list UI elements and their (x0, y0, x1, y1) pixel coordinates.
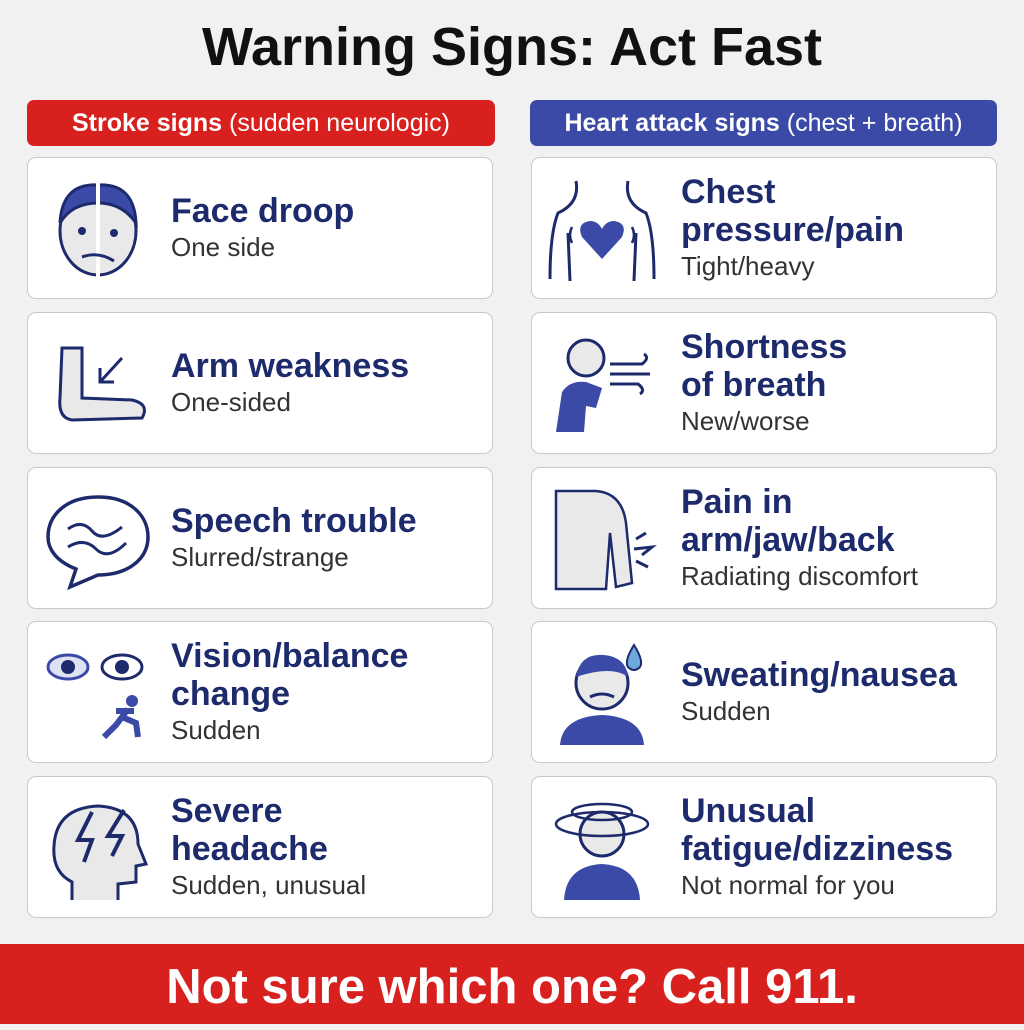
card: chest pressure: pressure/pain (681, 211, 904, 249)
card: face droop (27, 157, 493, 299)
card: shortness of breath (531, 312, 997, 454)
header: heart attack signs (530, 100, 997, 146)
card: severe headache (27, 776, 493, 918)
card: pain arm/jaw/back (531, 467, 997, 609)
card: arm weakness: One-sided (171, 387, 291, 417)
card: speech trouble (27, 467, 493, 609)
card: fatigue/dizziness: Unusual (681, 792, 815, 830)
header: stroke signs (27, 100, 495, 146)
card: face droop: Face droop (171, 192, 354, 230)
card: chest pressure (531, 157, 997, 299)
card: vision/balance: Sudden (171, 715, 261, 745)
footer banner: Not sure which one? Call 911. (166, 960, 858, 1014)
card: sweating/nausea (531, 621, 997, 763)
card: sweating/nausea: Sweating/nausea (681, 656, 957, 694)
card: face droop: One side (171, 232, 275, 262)
title: Warning Signs: Act Fast (202, 17, 822, 77)
card: severe headache: Severe (171, 792, 283, 830)
card: fatigue/dizziness (531, 776, 997, 918)
card: shortness of breath: of breath (681, 366, 826, 404)
card: speech trouble: Slurred/strange (171, 542, 349, 572)
card: speech trouble: Speech trouble (171, 502, 417, 540)
card: vision/balance (27, 621, 493, 763)
card: severe headache: headache (171, 830, 328, 868)
card: chest pressure: Chest (681, 173, 775, 211)
card: fatigue/dizziness: Not normal for you (681, 870, 895, 900)
card: arm weakness: Arm weakness (171, 347, 409, 385)
card: vision/balance: change (171, 675, 290, 713)
card: fatigue/dizziness: fatigue/dizziness (681, 830, 953, 868)
card: arm weakness (27, 312, 493, 454)
card: sweating/nausea: Sudden (681, 696, 771, 726)
header: heart attack signs: Heart attack signs (chest + breath) (564, 109, 963, 137)
card: shortness of breath: New/worse (681, 406, 810, 436)
header: stroke signs: Stroke signs (sudden neurologic) (72, 109, 450, 137)
card: shortness of breath: Shortness (681, 328, 847, 366)
card: chest pressure: Tight/heavy (681, 251, 814, 281)
card: pain arm/jaw/back: Radiating discomfort (681, 561, 918, 591)
card: pain arm/jaw/back: Pain in (681, 483, 792, 521)
card: pain arm/jaw/back: arm/jaw/back (681, 521, 895, 559)
card: vision/balance: Vision/balance (171, 637, 408, 675)
card: severe headache: Sudden, unusual (171, 870, 366, 900)
footer banner (0, 944, 1024, 1024)
